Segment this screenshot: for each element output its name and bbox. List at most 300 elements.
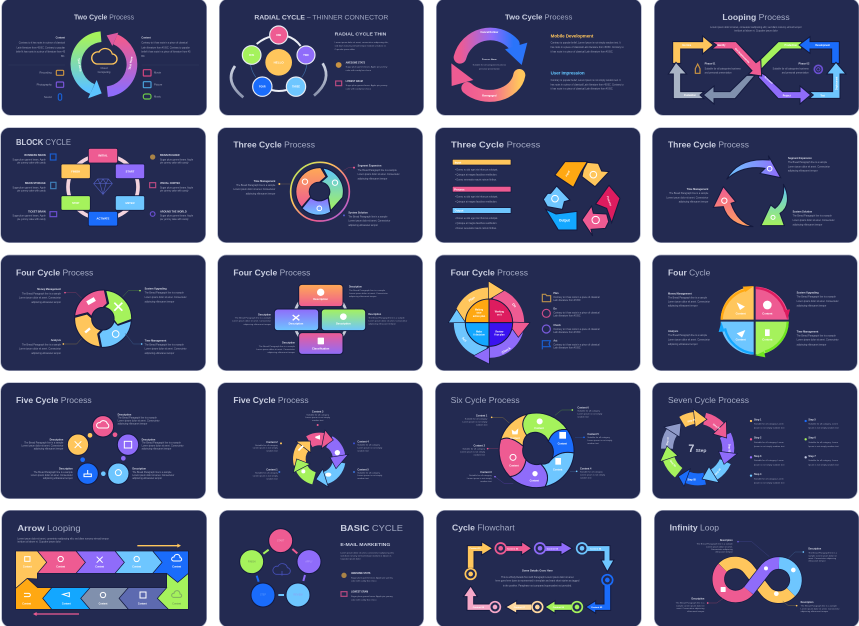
steps col 1: Suitable for all category. Lorem	[754, 423, 784, 426]
right text: BC.	[141, 56, 146, 58]
notes: Lorem ipsum dolor sit amet. Consectetur	[132, 474, 174, 477]
slide: Three Cycle Process recycle	[435, 128, 640, 243]
notes: Description	[59, 468, 73, 471]
arc labels: Plan	[468, 296, 476, 303]
slide: Looping Process	[654, 0, 859, 115]
bottom dot	[343, 214, 345, 216]
notes left: Money Management	[37, 288, 61, 291]
title: Two Cycle Process	[74, 14, 134, 21]
left note: adipiscing elitracanet tempor	[246, 192, 276, 195]
heading: RADIAL CYCLE THIN	[335, 31, 387, 36]
notes: Description	[368, 313, 382, 316]
left notes: pie yummy cake with candy	[17, 190, 46, 193]
notes: Lorem ipsum dolor sit amet.	[706, 545, 733, 548]
notes left: The Bread Paragraph line is a sample	[668, 296, 708, 299]
notes: Content 2	[266, 441, 278, 444]
right note	[358, 165, 400, 180]
slide: Four Cycle	[652, 255, 857, 371]
node icons	[468, 546, 610, 609]
notes: amet. Consectetur adipiscing	[677, 607, 705, 610]
notes left	[19, 288, 62, 355]
center text	[473, 59, 506, 70]
gram text: Sugar plum gummi bears. Apple pie yummy	[346, 84, 388, 87]
icon: cloud	[273, 564, 290, 576]
circle labels: ONE	[276, 35, 282, 37]
title: RADIAL CYCLE – THINNER CONNECTOR	[254, 14, 389, 21]
slide: Three Cycle Process ring	[218, 128, 423, 243]
arrow labels: Content 02	[507, 548, 519, 551]
slide: Radial Cycle	[219, 0, 424, 115]
notes: random text	[580, 476, 592, 479]
bullets: • Donec venenatis mauris rutrum finibus.	[455, 179, 497, 182]
notes: The Bread Paragraph line is a	[808, 552, 838, 555]
left notes: Sugar plum gummi bears. Apple	[13, 215, 46, 218]
chevrons	[16, 551, 188, 609]
notes: Content 2	[474, 445, 486, 448]
blocks	[274, 284, 366, 354]
paragraph: sed diam nonumy eirmod tempor invidunt ut labore et.	[340, 555, 392, 558]
notes: The Bread Paragraph line is a sample	[349, 289, 386, 292]
notes: Suitable for all category	[465, 418, 488, 421]
steps col 2: Suitable for all category. Lorem	[808, 441, 838, 444]
mobile text: it has roots in a piece of classical Latin literature from 45 BC.	[551, 51, 614, 54]
subheading: E-MAIL MARKETING	[340, 542, 390, 548]
right notes: Sugar plum gummi bears. Apple	[160, 186, 194, 189]
block labels: ACTIVATE	[97, 217, 110, 221]
left list: Recording	[40, 71, 52, 75]
note right: The Bread Paragraph line is a sample	[793, 215, 832, 218]
notes: The Bread Paragraph line is a sample	[24, 441, 64, 444]
block labels	[71, 154, 135, 221]
bottom note: System Solution	[348, 211, 368, 214]
block labels: FINISH	[71, 169, 80, 173]
notes: The Bread Paragraph line is a sample	[235, 317, 272, 320]
steps col 2: Ipsum is not simply random text	[808, 445, 839, 448]
outer bands	[460, 293, 518, 352]
notes: Suitable for all category	[357, 471, 381, 474]
legend text: Contrary to it has roots in a piece of classical	[553, 344, 600, 347]
left note: Lorem ipsum dolor sit amet. Consectetur	[233, 188, 276, 191]
arrow labels: Step 07	[666, 436, 670, 446]
paragraph	[335, 41, 389, 51]
title: Three Cycle Process	[233, 140, 315, 150]
arrow labels: Project	[783, 94, 791, 97]
bullets: • Donec eu dui eget nisi rhoncus volutpat.	[455, 195, 498, 198]
steps col 1: Ipsum is not simply random text	[754, 427, 785, 430]
phase 1	[705, 62, 741, 75]
legend text: Latin literature from 45 BC	[553, 299, 581, 302]
note right	[793, 211, 835, 226]
notes right: adipiscing elitracanet tempor	[797, 343, 827, 346]
paragraph: Lorem ipsum dolor sit amet, consectetur sadipscing elitr,	[335, 41, 389, 44]
notes right: adipiscing elitracanet tempor	[145, 300, 175, 303]
slide: Four Cycle Process blocks	[218, 255, 423, 371]
left text: BC.	[61, 56, 65, 58]
title: Six Cycle Process	[451, 396, 520, 405]
notes: Content 3	[480, 471, 492, 474]
notes: Lorem ipsum dolor sit amet. Consectetur	[801, 607, 840, 610]
connectors	[487, 409, 585, 483]
left text	[16, 36, 66, 58]
stats text: Sugar plum gummi bears. Apple pie yummy	[346, 66, 388, 69]
steps col 2: Step 7	[808, 455, 816, 458]
slide: Five Cycle Process circles	[1, 383, 206, 499]
arrow icons	[298, 435, 340, 477]
arrow labels: Step 02	[712, 423, 721, 431]
center text: Some Details Goes Here	[522, 569, 553, 573]
center text: Process Name	[482, 59, 498, 61]
title: Three Cycle Process	[451, 140, 541, 150]
arrow labels: Content 05	[591, 606, 603, 609]
slide: Four Cycle Process donut	[1, 255, 206, 371]
right notes: Sugar plum gummi bears. Apple	[160, 215, 194, 218]
left text: Latin literature from 45 BC. Contrary to popular	[17, 46, 65, 49]
notes left	[668, 292, 710, 346]
notes: adipiscing elitracanet tempor	[801, 610, 828, 613]
wedge labels: Making	[475, 309, 484, 311]
swirl donut	[499, 413, 574, 488]
stats text: cake with candy bar choco	[351, 580, 377, 583]
outer ring	[291, 162, 349, 221]
segment labels: Content	[534, 427, 544, 430]
notes right	[797, 292, 839, 346]
notes left: Money Management	[668, 292, 692, 295]
pink segment	[718, 568, 749, 597]
notes right: adipiscing elitracanet tempor	[797, 305, 827, 308]
notes right: Lorem ipsum dolor sit amet. Consectetur	[145, 348, 187, 351]
chevron labels: Content	[132, 566, 141, 569]
ring	[68, 155, 138, 219]
notes right	[145, 288, 187, 355]
block labels: START	[126, 169, 135, 173]
quadrant labels: Content	[736, 337, 746, 341]
notes: Lorem ipsum is not simply	[460, 450, 486, 453]
right list	[143, 70, 163, 99]
chevron labels	[22, 566, 181, 605]
arrow left	[713, 187, 753, 227]
notes right: Time Management	[797, 330, 818, 333]
nodes	[465, 543, 613, 612]
stats text: AWESOME STATS	[346, 61, 366, 64]
notes: Lorem ipsum dolor sit amet. Consectetur	[31, 474, 73, 477]
direction arrows	[33, 544, 181, 616]
bullets: • Quisque at magna faucibus vestibulum.	[455, 174, 498, 177]
steps col 2	[804, 418, 839, 466]
gram text: cake with candy bar choco	[351, 598, 377, 601]
legend text: Contrary to it has roots in a piece of classical	[553, 312, 600, 315]
steps col 1: Suitable for all category. Lorem	[754, 477, 784, 480]
left text: Content	[56, 36, 65, 39]
gram text	[351, 591, 394, 601]
stats text: cake with candy bar choco	[346, 69, 372, 72]
legend text: Do	[553, 308, 557, 311]
steps col 2: Step 5	[808, 418, 816, 421]
right notes: pie yummy cake with candy	[160, 190, 189, 193]
mobile text: Mobile Development	[551, 33, 594, 38]
notes	[676, 539, 840, 613]
light blue segment	[779, 563, 796, 592]
paragraph	[340, 552, 394, 561]
note right: System Solution	[793, 211, 813, 214]
wedge labels: Make	[476, 331, 483, 333]
notes: random text	[577, 415, 589, 418]
circles	[67, 416, 139, 484]
circle labels: APPLY	[305, 560, 313, 563]
note left	[666, 188, 709, 204]
notes: Description	[801, 601, 814, 604]
inner wedges	[465, 299, 513, 346]
steps col 1	[750, 418, 785, 484]
arrow labels: Content 01	[469, 547, 481, 550]
left text: Contrary to it has roots in a piece of classical	[19, 42, 65, 45]
phase 2: Phase 02	[799, 63, 810, 66]
recycle labels: Output	[559, 219, 571, 223]
right notes	[160, 154, 194, 221]
steps col 2: Step 6	[808, 437, 816, 440]
subtitle: Lorem ipsum dolor sit amet, consetetur sadipscing elitr, sed diam nonumy eirmod tempor	[710, 26, 802, 29]
wedge labels: on it	[497, 314, 502, 317]
left notes: BRAIN STORAGE	[25, 182, 46, 185]
purple segment	[749, 563, 779, 591]
notes: elitracanet tempor	[715, 550, 733, 553]
notes: Content 6	[577, 406, 589, 409]
right text: Contrary to it has roots in a piece of classical	[141, 42, 188, 45]
note dots	[278, 424, 355, 473]
notes: Content 4	[580, 467, 592, 470]
connectors	[80, 432, 126, 476]
arrow labels: Content 07	[514, 606, 526, 609]
circle labels	[249, 35, 309, 89]
bar labels: Process	[454, 187, 465, 191]
legend text: Check	[553, 324, 561, 327]
slide: Cycle Flowchart	[436, 510, 641, 626]
mobile text: Contrary to popular belief, Lorem Ipsum is not simply random text. It	[551, 41, 621, 44]
chevron labels: Content	[172, 602, 181, 605]
notes: Content 4	[357, 441, 369, 444]
bar labels: Output	[455, 209, 463, 213]
arrow labels: Research	[763, 76, 773, 85]
title: Looping Process	[722, 12, 790, 22]
recycle labels: Input	[564, 170, 571, 177]
arrow labels	[682, 44, 838, 97]
segment labels: Content	[509, 464, 519, 467]
slide: Six Cycle Process	[435, 383, 640, 499]
cycle arrows	[76, 33, 134, 98]
left list: Sound	[44, 95, 52, 99]
note left: The Bread Paragraph line is a sample	[669, 192, 709, 195]
chevron icons	[24, 554, 182, 598]
block labels: Classification	[312, 347, 330, 351]
arc labels: Check	[501, 346, 512, 355]
left list	[37, 70, 64, 100]
notes: random text	[587, 442, 599, 445]
legend icons	[542, 294, 551, 349]
slide: Infinity Loop	[654, 510, 859, 626]
arrow labels: Production	[785, 44, 797, 47]
quadrants	[721, 287, 789, 355]
stats text	[346, 61, 388, 72]
note right: adipiscing elitracanet tempor	[793, 223, 823, 226]
wedge labels: Review	[495, 331, 504, 333]
circle labels: FIVE	[249, 55, 255, 57]
slide: Block Cycle	[1, 128, 206, 243]
icon: gram	[336, 81, 342, 86]
subtitle	[710, 26, 802, 32]
circle labels: STEP	[260, 595, 266, 597]
notes: Suitable for all category	[469, 474, 493, 477]
notes: Description	[258, 313, 272, 316]
center circle	[265, 49, 292, 76]
arrow labels: Test	[820, 94, 825, 97]
notes left: Lorem ipsum dolor sit amet. Consectetur	[19, 348, 61, 351]
notes: Lorem ipsum dolor sit amet. Consectetur	[368, 319, 407, 322]
wedge labels: A decision	[473, 334, 485, 337]
bullets: • Donec eu dui eget nisi rhoncus volutpat.	[455, 217, 498, 220]
circles	[240, 529, 321, 607]
notes: Suitable for all category	[255, 472, 279, 475]
quadrant labels: Content	[762, 311, 772, 315]
arrow heads	[660, 409, 737, 486]
arrow labels: Identify	[717, 44, 726, 47]
recycle labels: Process	[606, 195, 613, 207]
steps col 1: Step 2	[754, 437, 762, 440]
bullets: • Quisque at magna faucibus vestibulum.	[455, 200, 498, 203]
subtitle: Lorem ipsum dolor sit amet, consetetur sadipscing elitr, sed diam nonumy eirmod tempor	[17, 537, 109, 540]
cloud label: Computing	[98, 70, 111, 74]
note left: Lorem ipsum dolor sit amet. Consectetur	[666, 196, 709, 199]
notes: amet. Consectetur adipiscing	[808, 557, 837, 560]
title: Four Cycle	[668, 268, 711, 277]
wedge labels: action plan	[473, 315, 486, 318]
notes: Lorem ipsum dolor sit amet. Consectetur	[118, 420, 160, 423]
infinity arrows	[668, 36, 846, 104]
cycle arrows: Text Here	[128, 56, 134, 70]
left notes: pie yummy cake with candy	[17, 162, 46, 165]
notes: Suitable for all category	[357, 444, 381, 447]
left icons	[50, 154, 57, 217]
left notes: Sugar plum gummi bears. Apple	[13, 186, 46, 189]
right list: Music	[154, 94, 162, 98]
left notes: Sugar plum gummi bears. Apple	[13, 158, 46, 161]
notes: Lorem ipsum is not simply	[467, 477, 493, 480]
connectors	[62, 290, 142, 345]
notes: Lorem ipsum is not simply	[580, 473, 606, 476]
notes: Lorem ipsum is not simply	[357, 474, 383, 477]
slide: Seven Cycle Process	[652, 383, 857, 499]
arc labels: Reengaged	[482, 93, 497, 97]
center text	[495, 569, 580, 587]
title: Five Cycle Process	[16, 396, 92, 405]
bar labels	[454, 160, 465, 213]
bottom note: adipiscing elitracanet tempor	[348, 224, 378, 227]
slide: Two Cycle Process	[2, 0, 207, 115]
notes left: Lorem ipsum dolor sit amet. Consectetur	[19, 297, 61, 300]
connectors	[707, 541, 804, 606]
donut	[75, 290, 132, 347]
stats text	[351, 572, 394, 583]
notes: Suitable for all category	[580, 470, 603, 473]
notes right: The Bread Paragraph line is a sample	[145, 292, 184, 295]
donut icons	[84, 297, 122, 337]
arrow icons	[722, 166, 775, 219]
icon: gear	[814, 65, 822, 73]
center text: here goes here down to represented in template and want short stories as tagged	[495, 580, 580, 583]
right notes: AROUND THE WORLD	[160, 210, 187, 213]
title: Three Cycle Process	[668, 141, 749, 150]
icon: rocket	[695, 64, 700, 73]
left notes: BUSINESS BRAIN	[24, 154, 46, 157]
bullets: • Donec eu dui eget nisi rhoncus volutpat.	[455, 169, 498, 172]
center text: This is a Body Details Text with Paragraph Lorem Ipsum dolor sit amet	[501, 576, 574, 579]
quadrant labels: Content	[736, 311, 746, 315]
recycle icons	[552, 171, 599, 224]
notes right: adipiscing elitracanet tempor	[145, 352, 175, 355]
notes right: The Bread Paragraph line is a sample	[797, 335, 836, 338]
left notes: pie yummy cake with candy	[17, 218, 46, 221]
notes: Content 5	[587, 433, 599, 436]
icon: gram	[341, 592, 347, 596]
arrow labels: Step 05	[688, 478, 697, 481]
notes: random text	[480, 480, 492, 483]
notes left: The Bread Paragraph line is a sample	[668, 334, 708, 337]
slide: Three Cycle Process arrows	[652, 128, 857, 243]
legend text: Plan	[553, 292, 559, 295]
note top	[788, 157, 830, 173]
bottom arrow	[451, 63, 519, 96]
user text: User Impression	[551, 71, 585, 76]
notes: Lorem ipsum is not simply	[253, 474, 279, 477]
right note: Segment Expansion	[358, 165, 382, 168]
notes: Content 5	[357, 468, 369, 471]
left note	[233, 180, 276, 195]
segments	[296, 168, 343, 215]
steps col 1: Ipsum is not simply random text	[754, 445, 785, 448]
bottom note: Lorem ipsum dolor sit amet. Consectetur	[348, 220, 390, 223]
segment icons	[510, 418, 566, 476]
notes: Description	[282, 341, 296, 344]
notes: Consectetur adipiscing	[711, 548, 733, 551]
left note: Time Management	[254, 180, 275, 183]
subtitle: invidunt ut labore et. Cupcake ipsum dolor	[17, 541, 61, 544]
steps col 1: Suitable for all category. Lorem	[754, 441, 784, 444]
legend text	[553, 292, 600, 350]
steps col 1: Ipsum is not simply random text	[754, 463, 785, 466]
bar labels: Input	[455, 160, 461, 164]
slide: Two Cycle Process 2	[436, 0, 641, 115]
notes right: Time Management	[145, 340, 166, 343]
chevron labels: Content	[62, 602, 71, 605]
notes: Description	[142, 438, 156, 441]
chevron labels: Content	[172, 566, 181, 569]
notes: Suitable for all category	[255, 444, 279, 447]
arrow labels	[666, 418, 730, 481]
title: Two Cycle Process	[505, 12, 572, 21]
notes: Content 1	[266, 469, 278, 472]
bottom note	[348, 211, 390, 227]
slide: Arrow Looping	[2, 510, 207, 626]
arc labels	[461, 296, 517, 355]
steps col 1: Step 4	[754, 473, 762, 476]
chevron labels: Content	[99, 602, 108, 605]
segment labels: Content	[530, 479, 539, 482]
notes: Content 3	[312, 410, 324, 413]
notes: elitracanet tempor	[687, 610, 705, 613]
arrow labels: Evaluation	[684, 94, 696, 97]
left list: Photography	[37, 82, 52, 86]
right text: belief it has roots in a piece of literature from 45	[141, 51, 191, 54]
cloud label: Cloud	[101, 66, 108, 70]
recycle labels	[559, 170, 613, 223]
